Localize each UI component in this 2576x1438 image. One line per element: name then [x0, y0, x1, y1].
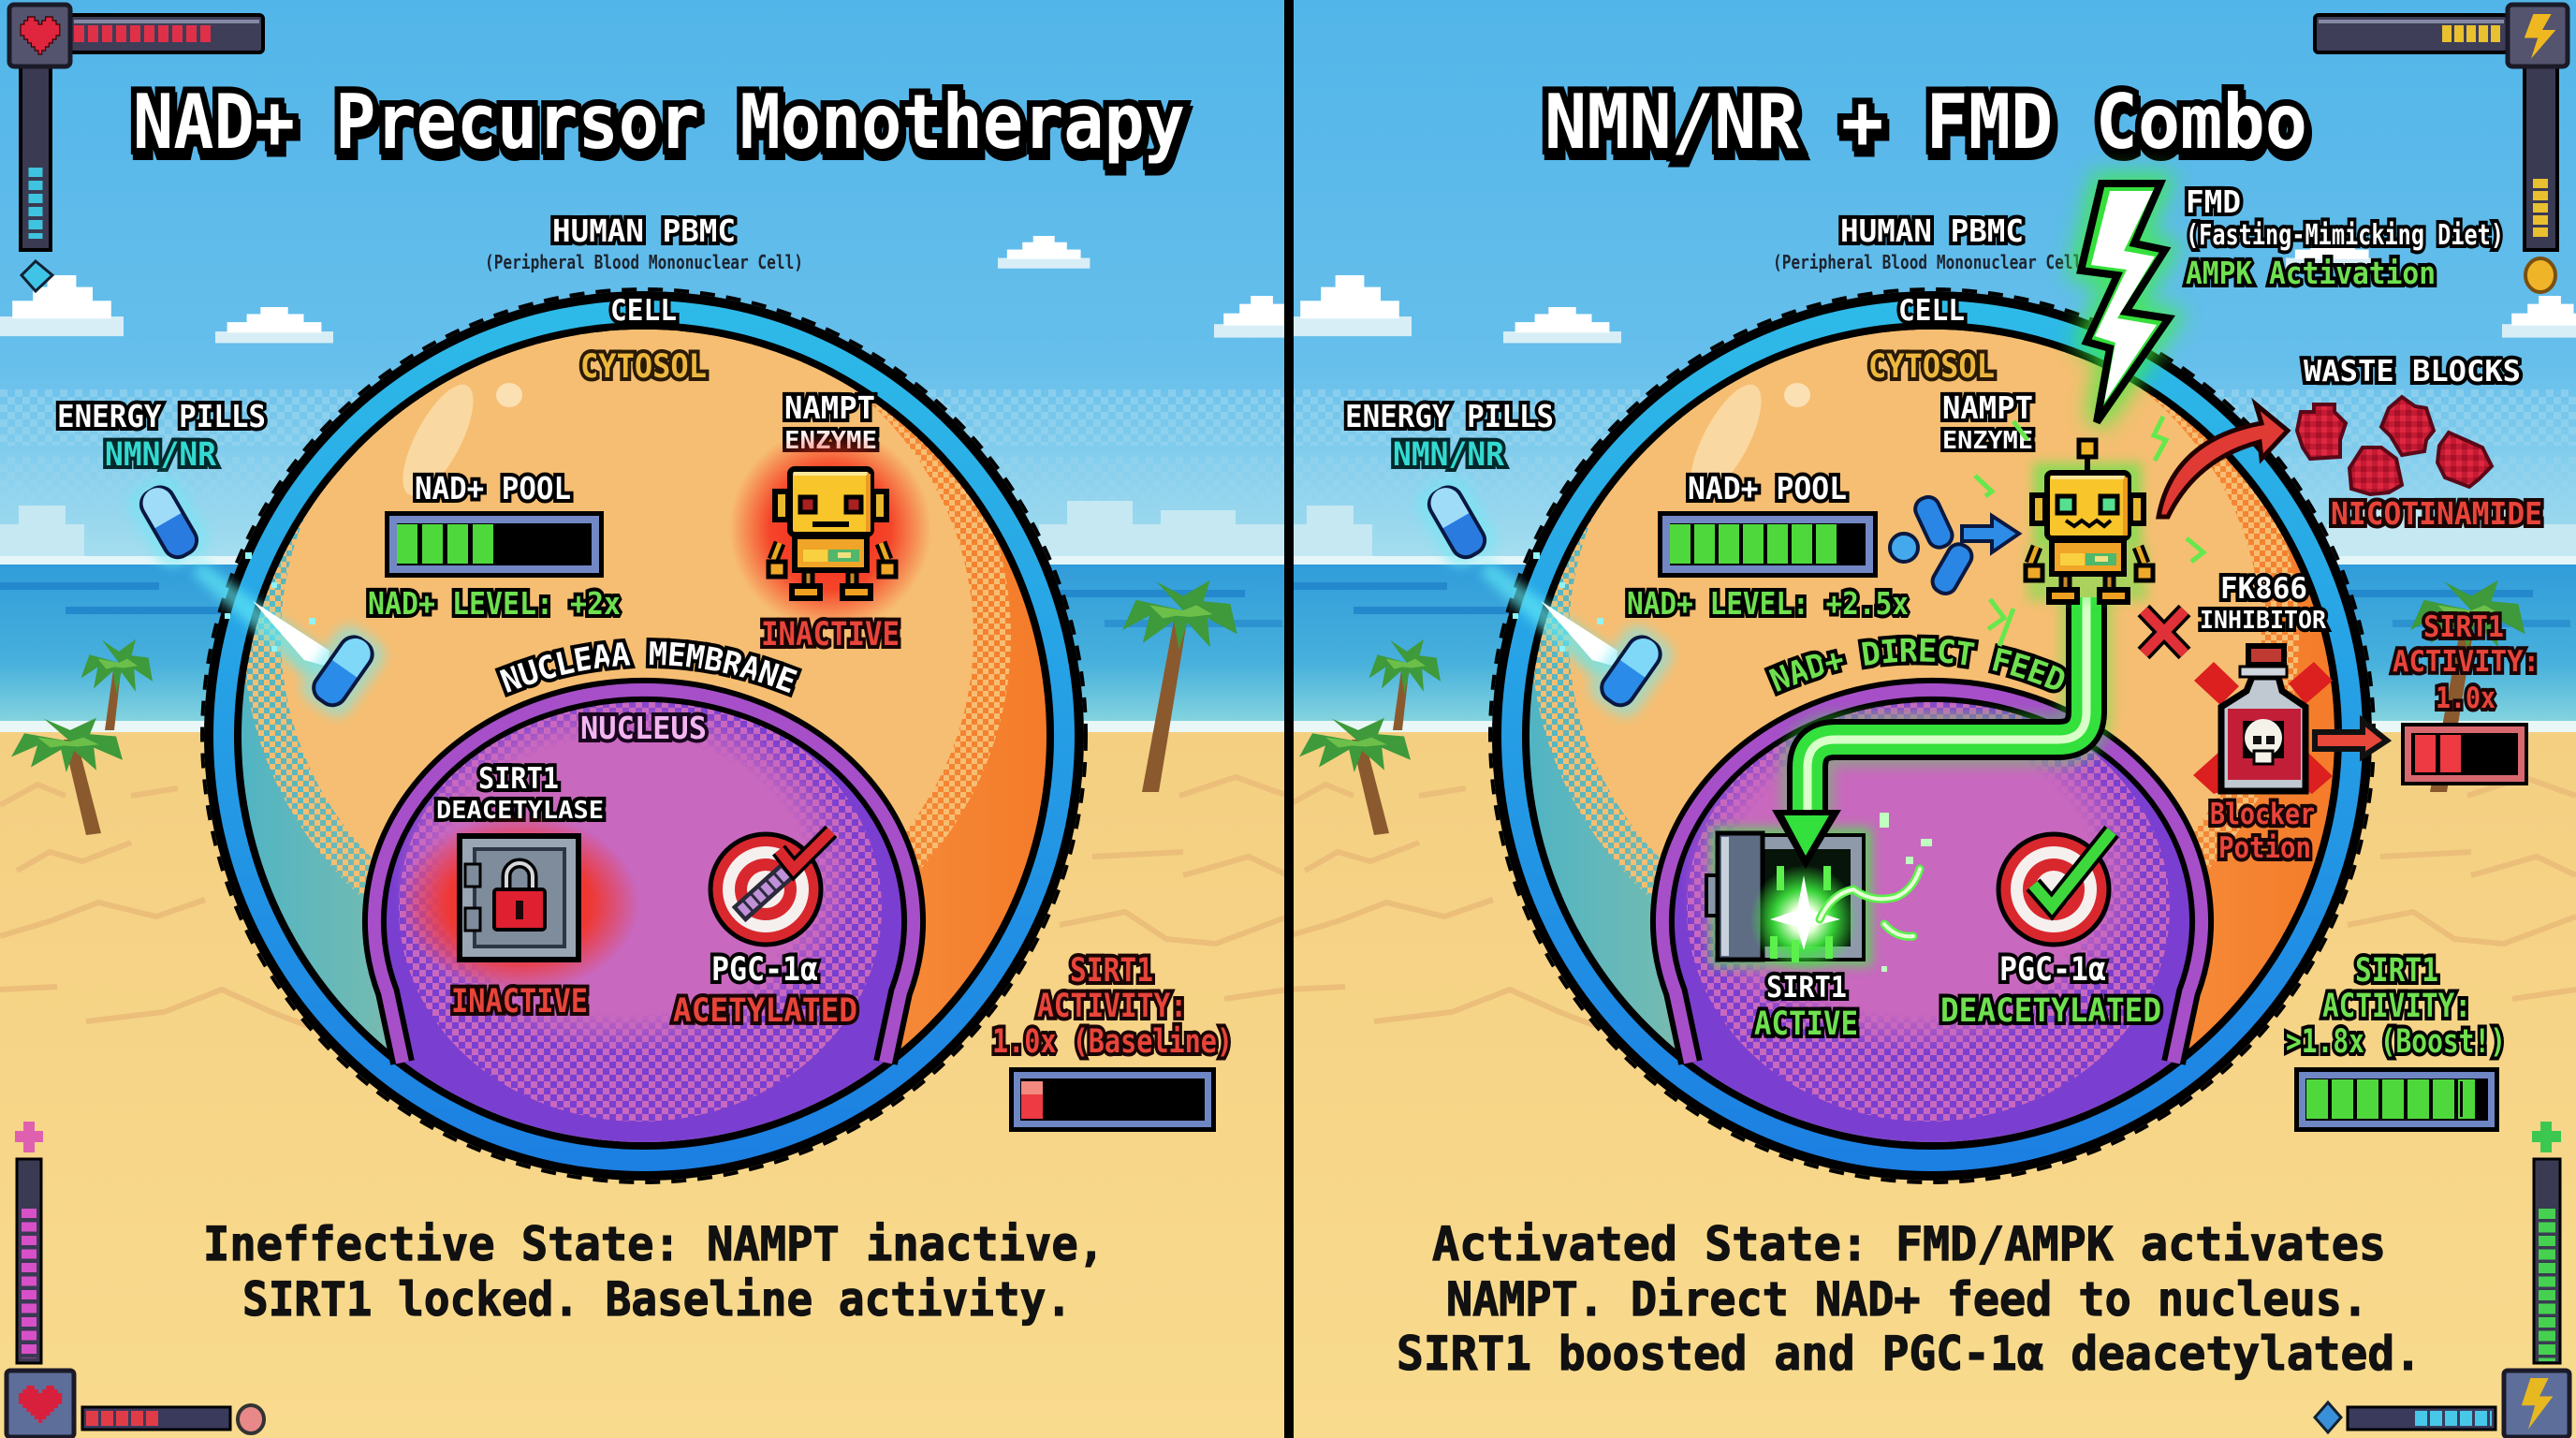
title: NAD+ Precursor Monotherapy — [133, 79, 1185, 166]
status: SIRT1 inactive: INACTIVE — [451, 983, 588, 1020]
label: SIRT1 activity: SIRT1 — [1070, 952, 1153, 990]
text: peripheral blood: (Peripheral Blood Mononuclear Cell) — [485, 251, 803, 273]
label: SIRT1 boosted activity: >1.8x (Boost!) — [2286, 1023, 2506, 1061]
label: SIRT1 boosted activity — [2286, 952, 2506, 1061]
caption: SIRT1 boosted and PGC-1α deacetylated. — [1397, 1327, 2422, 1381]
status: acetylated: ACETYLATED — [673, 992, 857, 1030]
label: NAD level: NAD+ LEVEL: +2.5x — [1627, 585, 1909, 622]
caption — [203, 1217, 1105, 1327]
icon: FMD lightning bolt — [2081, 183, 2169, 422]
icon: acetylated target — [710, 831, 831, 945]
label: blocker potion: Potion — [2218, 831, 2311, 865]
label: SIRT1 activity: 1.0x (Baseline) — [992, 1023, 1233, 1061]
heading: human PBMC: HUMAN PBMC — [552, 213, 736, 249]
label: NAMPT enzyme: NAMPT — [784, 389, 875, 426]
icon: deacetylated target — [1998, 831, 2112, 945]
arrow: potion to bar — [2315, 721, 2387, 756]
label: energy pills: ENERGY PILLS — [1345, 398, 1554, 434]
label: NAMPT enzyme — [784, 389, 877, 455]
icon: locked safe — [400, 814, 639, 992]
label: FMD: AMPK Activation — [2186, 255, 2436, 291]
nuclear membrane arc — [374, 690, 914, 1063]
label: SIRT1 blocked activity — [2393, 610, 2539, 715]
label: FK866 inhibitor — [2200, 572, 2326, 635]
text: peripheral blood: (Peripheral Blood Mononuclear Cell) — [1773, 251, 2091, 273]
icon: energy pills entering the cell — [123, 469, 391, 724]
HUD: top-right lightning and bars — [2315, 5, 2568, 292]
icon: active open safe — [1706, 828, 1872, 966]
label: blocker potion — [2210, 798, 2315, 865]
label: NAD level: NAD+ LEVEL: +2x — [368, 585, 621, 622]
label: SIRT1 activity — [992, 952, 1233, 1061]
label: PGC-1 alpha: PGC-1α — [711, 951, 818, 989]
icon: active NAMPT robot — [1975, 417, 2203, 646]
bar: blocked SIRT1 activity — [2401, 723, 2528, 785]
label: FMD: FMD — [2186, 183, 2241, 220]
label: SIRT1 active: SIRT1 — [1766, 971, 1847, 1005]
bar: NAD pool level — [1658, 511, 1878, 578]
HUD: top-left heart and bars — [9, 5, 263, 291]
status: NAMPT inactive: INACTIVE — [761, 616, 900, 653]
divider between panels — [1284, 0, 1294, 1438]
icon: blocker potion — [2193, 646, 2333, 794]
cell membrane ring — [202, 289, 1086, 1182]
label: SIRT1 blocked activity: 1.0x — [2436, 682, 2496, 715]
panel: left cell diagram — [202, 276, 1086, 1182]
label: nucleus: NUCLEUS — [580, 710, 707, 746]
panel: left monotherapy content — [4, 2, 1233, 1438]
icon: red X — [2144, 610, 2185, 653]
bar: NAD pool level — [385, 511, 604, 578]
label: SIRT1 deacetylase: DEACETYLASE — [436, 797, 604, 825]
bar: boosted SIRT1 activity — [2294, 1067, 2499, 1132]
label: waste blocks: WASTE BLOCKS — [2304, 355, 2521, 389]
label: NAMPT enzyme: ENZYME — [784, 427, 877, 455]
label: nicotinamide: NICOTINAMIDE — [2331, 495, 2542, 532]
title: NMN/NR + FMD Combo — [1544, 79, 2307, 166]
label: NAD pool: NAD+ POOL — [1688, 470, 1847, 506]
status: deacetylated: DEACETYLATED — [1940, 992, 2161, 1030]
label: SIRT1 boosted activity: SIRT1 — [2355, 952, 2438, 990]
label: NAMPT enzyme — [1942, 389, 2033, 455]
label: NAD pool: NAD+ POOL — [415, 470, 571, 506]
panel: right cell diagram — [1490, 276, 2374, 1182]
label: cell: CELL — [1898, 294, 1965, 328]
panel: right combo content — [1344, 2, 2572, 1438]
nucleus — [374, 690, 914, 1152]
HUD: bottom-left heart and bars — [7, 1122, 264, 1437]
label: PGC-1 alpha: PGC-1α — [1999, 951, 2106, 989]
caption: NAMPT. Direct NAD+ feed to nucleus. — [1446, 1272, 2368, 1327]
caption — [1397, 1217, 2422, 1381]
icon: nicotinamide waste blocks — [2297, 397, 2492, 494]
caption: SIRT1 locked. Baseline activity. — [242, 1272, 1072, 1327]
label: NAMPT enzyme: ENZYME — [1942, 427, 2033, 455]
icon: pipe arrow head — [1772, 810, 1841, 869]
arrow: NAD direct feed pipe — [1808, 597, 2086, 814]
heading: human PBMC: HUMAN PBMC — [1840, 213, 2024, 249]
label: FK866 inhibitor: INHIBITOR — [2200, 607, 2326, 635]
icon: inactive NAMPT robot — [729, 428, 931, 630]
label: SIRT1 active: ACTIVE — [1754, 1005, 1858, 1043]
cytosol — [234, 276, 1058, 1152]
label: cytosol: CYTOSOL — [580, 348, 707, 386]
label: SIRT1 active — [1754, 971, 1858, 1043]
caption: Activated State: FMD/AMPK activates — [1432, 1217, 2386, 1271]
arrow: waste out — [2159, 404, 2288, 517]
label: SIRT1 deacetylase — [436, 762, 604, 825]
label: FK866 inhibitor: FK866 — [2220, 572, 2307, 606]
label: NMN/NR: NMN/NR — [1393, 436, 1505, 474]
label: nuclear membrane: NUCLEAA MEMBRANE — [494, 638, 802, 698]
bar: SIRT1 activity baseline — [1009, 1067, 1216, 1132]
label: blocker potion: Blocker — [2210, 798, 2315, 831]
label: SIRT1 activity: ACTIVITY: — [1037, 988, 1187, 1025]
icon: energy pills entering the cell — [1411, 469, 1679, 724]
label: cell: CELL — [610, 294, 677, 328]
label: energy pills: ENERGY PILLS — [57, 398, 266, 434]
icon: pills feeding NAMPT — [1890, 493, 2019, 597]
label: NAD direct feed: NAD+ DIRECT FEED — [1764, 635, 2066, 697]
label: NAMPT enzyme: NAMPT — [1942, 389, 2033, 426]
HUD: bottom-right lightning and bars — [2315, 1122, 2569, 1437]
label: FMD — [2186, 183, 2504, 291]
panel: left background scene — [0, 0, 1310, 1438]
icon: green energy burst — [1749, 813, 1932, 974]
label: SIRT1 boosted activity: ACTIVITY: — [2322, 988, 2471, 1025]
label: SIRT1 deacetylase: SIRT1 — [478, 762, 559, 796]
panel: right background scene — [1288, 0, 2576, 1438]
label: NMN/NR: NMN/NR — [105, 436, 217, 474]
caption: Ineffective State: NAMPT inactive, — [203, 1217, 1105, 1271]
label: SIRT1 blocked activity: ACTIVITY: — [2393, 645, 2539, 679]
label: SIRT1 blocked activity: SIRT1 — [2423, 610, 2504, 644]
label: cytosol: CYTOSOL — [1868, 348, 1995, 386]
